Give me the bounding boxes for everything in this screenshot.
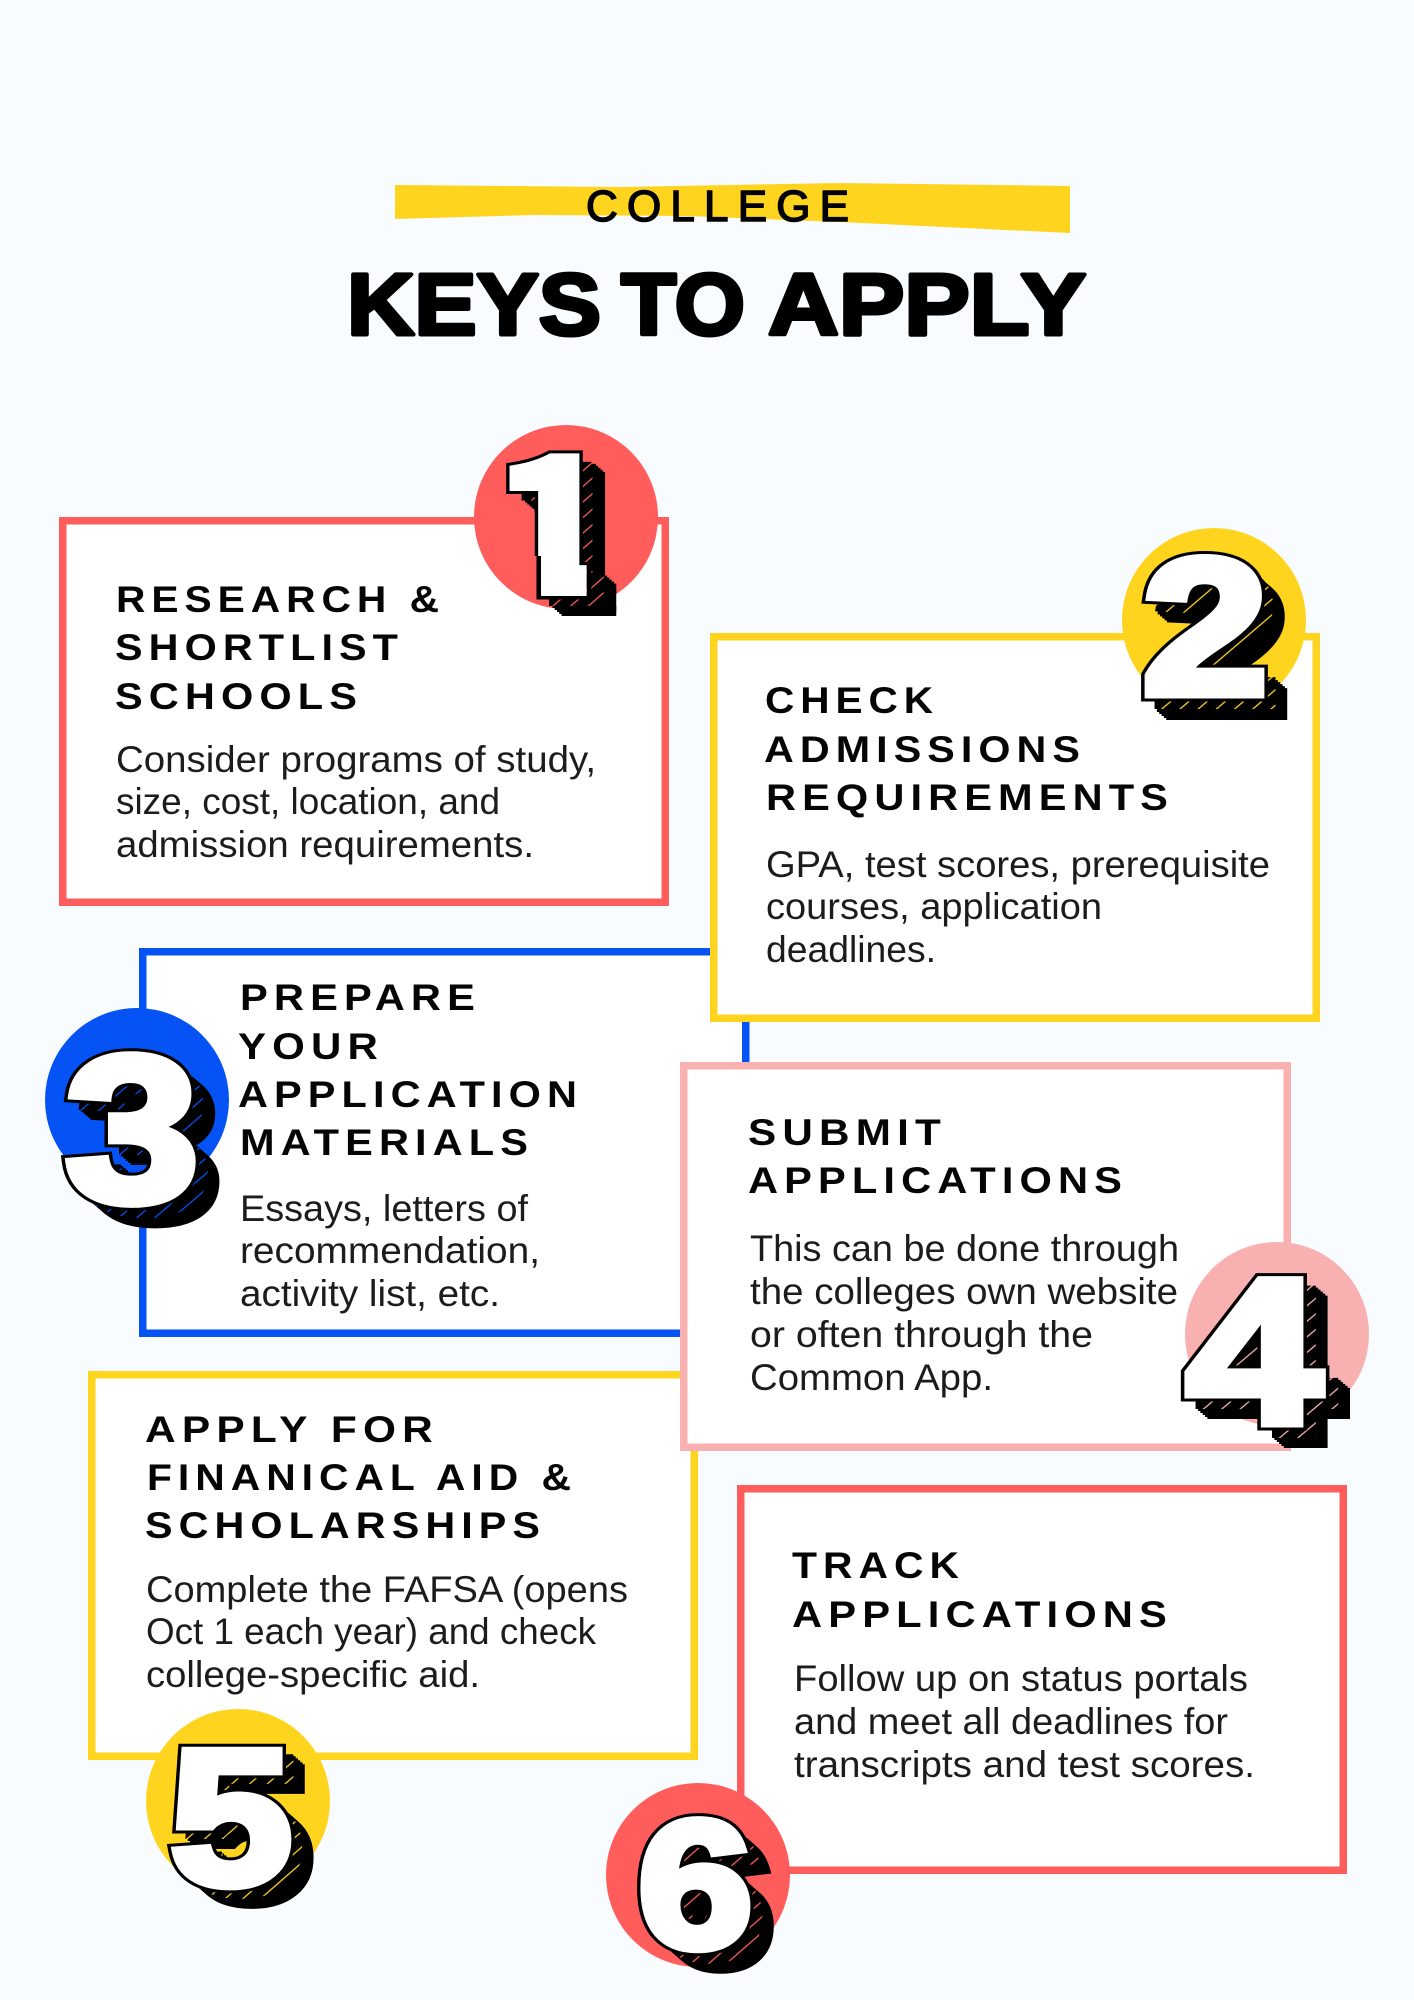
number 3: 3 (84, 1029, 218, 1261)
number 1: 1 (505, 387, 630, 655)
number 1: 1 (515, 395, 640, 663)
panel: step 4 submit (684, 1066, 1369, 1487)
body text step 2: GPA, test scores, prerequisite (766, 844, 1270, 885)
yellow brush highlight (395, 183, 1070, 233)
heading step 2 (764, 679, 1174, 818)
number 4: 4 (1186, 1236, 1322, 1467)
number 6: 6 (656, 1800, 771, 2000)
number 1: 1 (517, 397, 642, 665)
body text step 2: deadlines. (766, 929, 936, 970)
panel border red (63, 521, 665, 902)
number 1: 1 (492, 378, 617, 646)
number 4: 4 (1203, 1250, 1338, 1481)
panel border red (741, 1489, 1343, 1870)
heading step 1: RESEARCH & (116, 578, 445, 620)
body text step 1: size, cost, location, and (116, 781, 500, 822)
number 4: 4 (1210, 1256, 1345, 1487)
number 1: 1 (510, 391, 635, 659)
heading step 4: APPLICATIONS (748, 1159, 1128, 1201)
heading step 5 (145, 1408, 577, 1546)
number 3: 3 (77, 1023, 211, 1255)
number 6: 6 (638, 1784, 753, 1986)
number circle 2 (1122, 528, 1306, 712)
number 2: 2 (1153, 529, 1279, 745)
heading step 2: CHECK (765, 679, 939, 721)
title: KEYS TO APPLY (347, 256, 1086, 354)
panel: step 6 track (606, 1489, 1343, 2000)
panel: step 5 financial aid (92, 1375, 694, 1943)
number 5: 5 (180, 1718, 303, 1933)
heading step 2: REQUIREMENTS (766, 776, 1174, 818)
title: KEYS TO APPLY: APPLY (768, 256, 1086, 354)
panel border yellow (714, 637, 1316, 1018)
number circle 5 (146, 1709, 330, 1893)
body text step 2 (766, 844, 1270, 970)
body text step 1: admission requirements. (116, 824, 534, 865)
body text step 4: This can be done through (750, 1228, 1179, 1269)
number 4: 4 (1207, 1254, 1343, 1485)
heading step 6 (792, 1544, 1173, 1635)
number 1: 1 (492, 378, 617, 646)
number 6: 6 (649, 1794, 764, 1996)
body text step 4 (750, 1228, 1179, 1398)
heading step 3: MATERIALS (240, 1121, 534, 1163)
number 4: 4 (1198, 1246, 1334, 1477)
body text step 6: Follow up on status portals (794, 1658, 1248, 1699)
number 5: 5 (170, 1710, 292, 1925)
heading step 2: ADMISSIONS (764, 728, 1086, 770)
panel border blue (143, 952, 746, 1333)
number 4: 4 (1205, 1252, 1341, 1483)
number 5: 5 (189, 1726, 312, 1941)
heading step 3 (238, 976, 583, 1163)
number 5: 5 (192, 1728, 314, 1943)
number circle 1 (474, 425, 658, 609)
number 5: 5 (183, 1720, 305, 1935)
number 2: 2 (1164, 540, 1290, 756)
heading step 6: TRACK (792, 1544, 965, 1586)
body text step 1 (116, 739, 596, 865)
number 5: 5 (170, 1710, 292, 1925)
number 2: 2 (1155, 532, 1281, 748)
number circle 6 (606, 1783, 790, 1967)
number 1 (506, 450, 616, 616)
body text step 5: college-specific aid. (146, 1654, 480, 1695)
body text step 4: or often through the (750, 1314, 1093, 1355)
title: KEYS TO APPLY: KEYS (347, 256, 601, 354)
number 2: 2 (1142, 519, 1268, 735)
heading step 5: FINANICAL AID & (147, 1456, 577, 1498)
panel border yellow (92, 1375, 694, 1756)
panel: step 3 materials (45, 952, 746, 1333)
subtitle: COLLEGE: COLLEGE (586, 182, 849, 231)
body text step 5 (146, 1569, 628, 1695)
heading step 3: YOUR (238, 1025, 384, 1067)
number 1: 1 (508, 389, 633, 657)
panel border pink (684, 1066, 1287, 1447)
number 2: 2 (1142, 519, 1268, 735)
number 3: 3 (65, 1013, 199, 1245)
number 3: 3 (81, 1027, 215, 1259)
heading step 1: SHORTLIST (115, 626, 404, 668)
heading step 5: APPLY FOR (145, 1408, 439, 1450)
number 5: 5 (187, 1724, 309, 1939)
number 6: 6 (659, 1802, 773, 2000)
number 3: 3 (86, 1031, 220, 1263)
number 3: 3 (88, 1033, 222, 1265)
panel: step 1 research (63, 378, 665, 902)
number circle 3 (45, 1008, 229, 1192)
body text step 4: the colleges own website (750, 1271, 1178, 1312)
heading step 3: PREPARE (240, 976, 481, 1018)
body text step 2: courses, application (766, 886, 1102, 927)
body text step 5: Complete the FAFSA (opens (146, 1569, 628, 1610)
number 2: 2 (1162, 538, 1288, 754)
title block (347, 182, 1086, 354)
number 6: 6 (652, 1796, 766, 1998)
number 1: 1 (513, 393, 638, 661)
heading step 4: SUBMIT (748, 1111, 947, 1153)
body text step 4: Common App. (750, 1357, 993, 1398)
heading step 4 (748, 1111, 1128, 1201)
number circle 4 (1185, 1242, 1369, 1426)
heading step 1: SCHOOLS (115, 675, 363, 717)
body text step 3: Essays, letters of (240, 1188, 529, 1229)
number 2: 2 (1157, 534, 1283, 750)
body text step 5: Oct 1 each year) and check (146, 1611, 596, 1652)
title: KEYS TO APPLY: TO (621, 256, 745, 354)
number 3: 3 (79, 1025, 213, 1257)
body text step 6: and meet all deadlines for (794, 1701, 1228, 1742)
number 4: 4 (1200, 1248, 1336, 1479)
number 3: 3 (65, 1013, 199, 1245)
body text step 3 (240, 1188, 540, 1314)
body text step 3: recommendation, (240, 1230, 540, 1271)
number 6: 6 (638, 1784, 753, 1986)
body text step 6 (794, 1658, 1255, 1785)
heading step 5: SCHOLARSHIPS (145, 1504, 546, 1546)
body text step 6: transcripts and test scores. (794, 1744, 1255, 1785)
heading step 3: APPLICATION (238, 1073, 583, 1115)
body text step 1: Consider programs of study, (116, 739, 596, 780)
body text step 3: activity list, etc. (240, 1273, 500, 1314)
number 5: 5 (185, 1722, 307, 1937)
heading step 1 (115, 578, 445, 717)
number 6: 6 (654, 1798, 769, 2000)
heading step 6: APPLICATIONS (792, 1593, 1173, 1635)
number 2: 2 (1160, 536, 1286, 752)
panel: step 2 requirements (714, 519, 1316, 1018)
number 4: 4 (1186, 1236, 1322, 1467)
